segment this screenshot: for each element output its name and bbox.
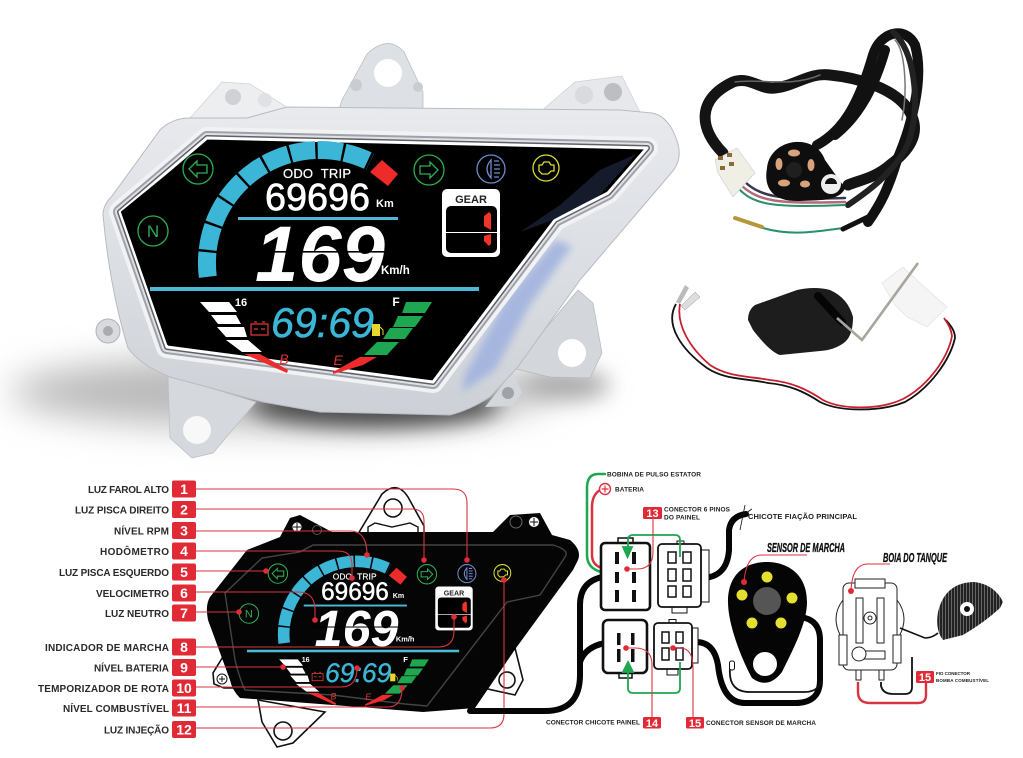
LCD display: diagram: GEAR [444,590,464,598]
label: main harness: CHICOTE FIAÇÃO PRINCIPAL [748,512,857,521]
badge 15 sensor: 15 [689,718,701,730]
LCD display: diagram: ODO TRIP [333,571,377,581]
LCD display: diagram: E [365,692,372,702]
title: gear sensor: SENSOR DE MARCHA [767,540,845,555]
wires: stator and battery [587,474,610,572]
long cyan bar [150,287,479,291]
icon: right arrow [414,155,444,185]
icon: high beam [477,155,505,183]
product photo: gear sensor harness [705,32,918,233]
label 12: 12 [176,722,192,738]
battery scale: 16 [235,297,247,309]
gear indicator [442,189,500,257]
badge 13: DO PAINEL [664,514,700,522]
label 9: 9 [180,660,188,676]
LCD display: diagram: Km [393,592,404,600]
sensor disk [766,142,845,201]
label 2: 2 [180,502,188,518]
label 5 [59,564,196,580]
badge 15 sensor: CONECTOR SENSOR DE MARCHA [706,720,816,727]
LCD display: diagram: 169 [315,600,399,657]
RPM arc [207,150,398,277]
icon: neutral: N [147,222,159,241]
badge 15 fuel [916,671,989,684]
label: main harness [740,505,857,530]
label 8: 8 [180,639,188,655]
km unit: Km [376,198,394,210]
white connector [715,148,755,197]
LCD display: diagram: Km/h [396,634,415,643]
badge 14: 14 [646,718,659,730]
housing [103,107,679,415]
label 2: LUZ PISCA DIREITO [75,506,169,516]
label 4: 4 [180,543,188,559]
green jumper wires [623,535,680,693]
badge 15 fuel: 15 [919,672,931,684]
badge 15 fuel: FIO CONECTOR [936,671,971,676]
top bracket [358,488,424,534]
bottom bracket [258,700,325,747]
speed digits: 169 [255,209,385,298]
badge 14 [546,717,661,730]
label 4 [100,542,196,560]
connector B [658,541,709,613]
icon: neutral [138,216,168,246]
label 4: HODÔMETRO [100,545,169,558]
icon: fuel pump [372,324,383,336]
badge 13: 13 [646,508,659,520]
badge 15 fuel: BOMBA COMBUSTÍVEL [936,676,989,683]
label 8: INDICADOR DE MARCHA [45,643,169,654]
connector callouts [623,519,693,717]
label 3: 3 [180,522,188,538]
LCD display: photo [138,150,559,374]
label 9 [94,659,196,676]
badge 13: CONECTOR 6 PINOS [664,506,731,514]
gear sensor diagram [728,540,845,692]
top right screw boss [540,76,640,112]
label 6 [96,584,196,602]
title: fuel float: BOIA DO TANQUE [883,550,947,565]
top bracket [338,43,423,112]
badge 14: CONECTOR CHICOTE PAINEL [546,720,640,726]
label 11: NÍVEL COMBUSTÍVEL [63,702,169,715]
label 1 [88,480,196,498]
bottom right screw lug [485,372,522,407]
black body [207,513,579,712]
label 8 [45,638,196,656]
connector A [601,538,650,610]
product photo: fuel float [672,263,955,410]
label 2 [75,501,196,518]
label 11 [63,700,196,716]
product photo: instrument cluster [10,43,679,458]
leader lines [196,489,504,728]
right bracket [470,640,523,695]
odometer digits: 69696 [265,177,370,219]
LCD display: diagram: 69696 [321,579,389,606]
label 3: NÍVEL RPM [114,524,169,538]
label 12: LUZ INJEÇÃO [104,724,169,736]
speed unit: Km/h [381,265,410,277]
LCD display: diagram [239,561,511,706]
callout list: numbered labels [38,480,507,738]
label 3 [114,522,196,539]
fuel scale: F [392,295,400,309]
label 5: LUZ PISCA ESQUERDO [59,568,169,579]
left tip [213,655,240,688]
label 10 [38,680,196,696]
diagram: panel body and brackets [207,488,579,747]
top left screw boss [190,82,285,118]
icon: engine [533,155,559,181]
label 5: 5 [180,564,188,580]
label 10: 10 [176,680,192,696]
battery scale [200,297,289,373]
connector D [654,620,698,675]
badge 15 sensor [686,717,816,730]
label 11: 11 [177,700,192,716]
label 1: 1 [180,481,188,497]
main cable to connectors [470,514,820,711]
icon: left arrow [183,154,213,184]
label: battery: BATERIA [615,486,644,494]
bottom left bracket [168,375,256,458]
leader dots [236,552,507,691]
LCD display: diagram: 69:69 [325,657,391,688]
fuel float diagram [836,550,1003,703]
battery scale: B [279,351,289,367]
fuel scale [333,295,432,374]
bottom right bracket [512,290,602,378]
route timer: 69:69 [271,299,374,346]
label 1: LUZ FAROL ALTO [88,485,169,496]
bezel rim and screen [120,138,647,382]
label 7 [105,604,196,622]
gear indicator: GEAR [455,194,487,206]
label 12 [104,721,196,738]
label 6: 6 [180,585,188,601]
LCD display: diagram: 16 [302,656,310,664]
LCD display: diagram: N [245,608,253,620]
left screw lug [96,319,120,343]
label 10: TEMPORIZADOR DE ROTA [38,684,169,695]
label 9: NÍVEL BATERIA [94,662,169,674]
label 7: LUZ NEUTRO [105,609,169,620]
badge 13 [643,506,731,522]
label: stator coil: BOBINA DE PULSO ESTATOR [607,472,701,478]
label 7: 7 [180,605,188,621]
label 6: VELOCIMETRO [96,589,169,600]
LCD display: diagram: F [403,655,408,664]
cyan divider [238,217,398,220]
fuel scale: E [333,352,343,368]
LCD display: diagram: B [330,691,336,701]
odometer labels: ODO TRIP [283,166,351,181]
connector C [603,620,647,678]
icon: battery [251,322,268,335]
